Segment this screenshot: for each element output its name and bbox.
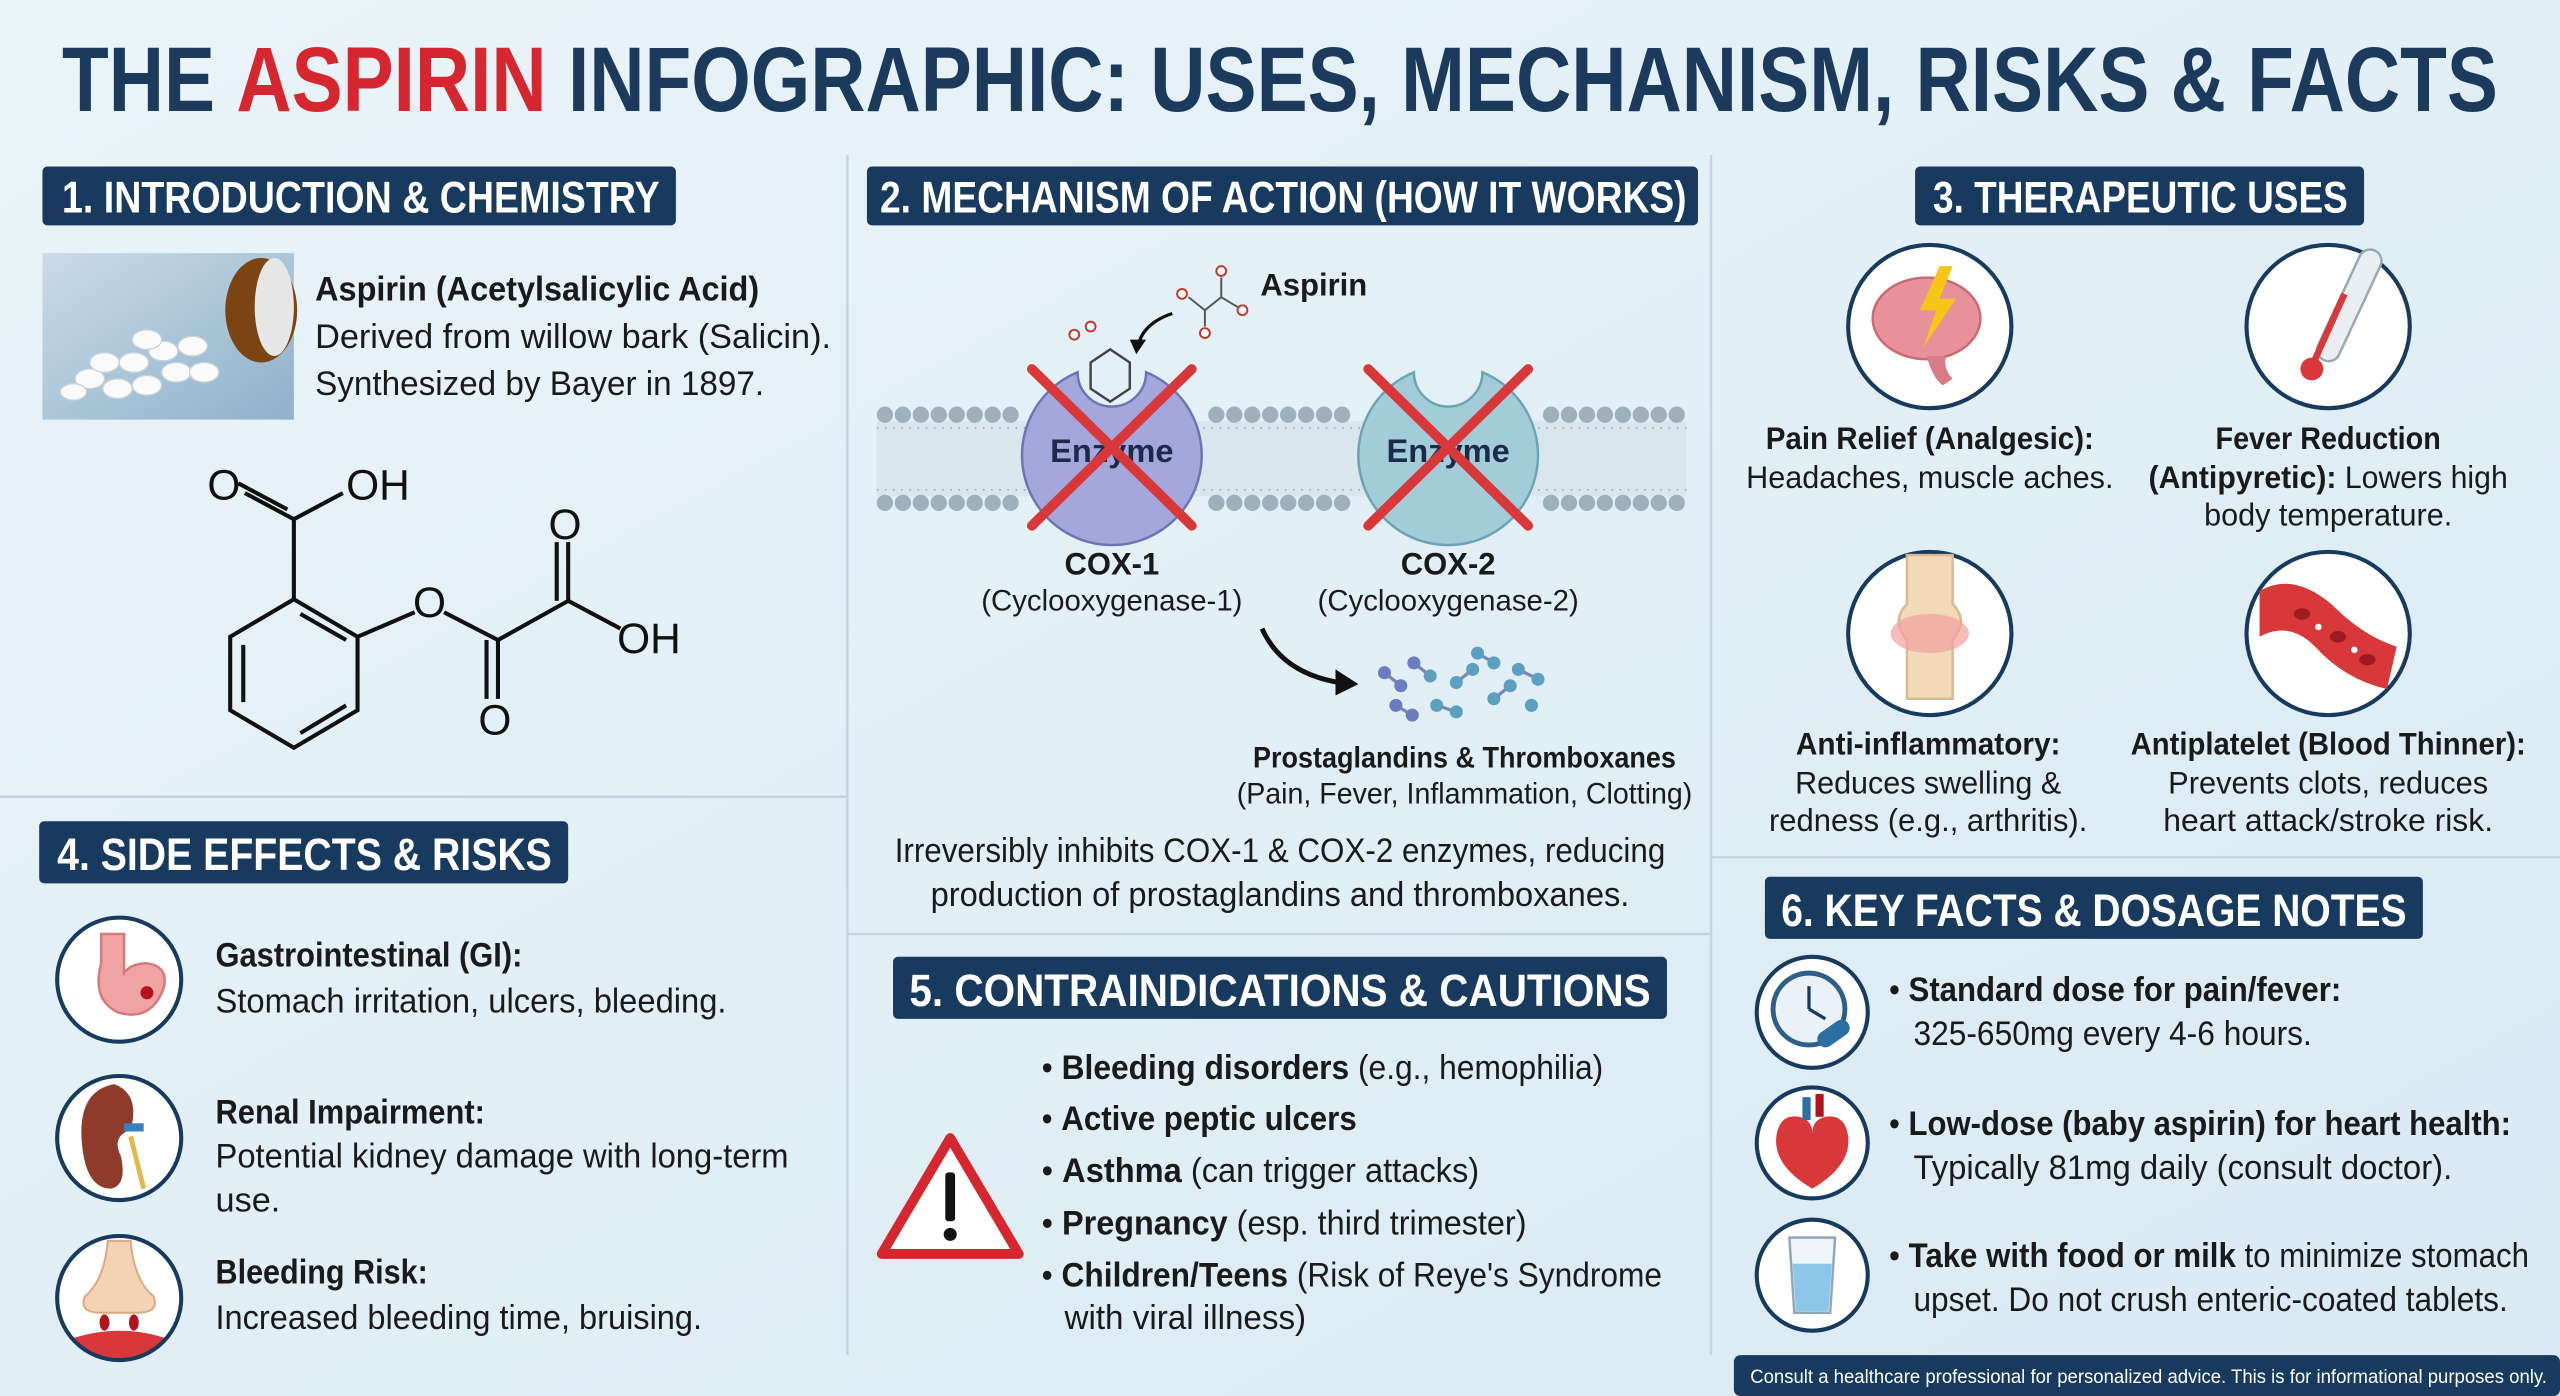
side effect texts: use. <box>216 1181 280 1219</box>
icon: heart <box>1757 1087 1868 1198</box>
key facts text: • Standard dose for pain/fever: <box>1889 971 2341 1009</box>
heading 1: 1. INTRODUCTION & CHEMISTRY <box>62 173 660 222</box>
use texts: Headaches, muscle aches. <box>1746 460 2113 495</box>
key facts text: 325-650mg every 4-6 hours. <box>1913 1015 2312 1053</box>
use texts: (Antipyretic): Lowers high <box>2149 460 2508 495</box>
photo: pills and bottle <box>42 253 297 420</box>
enzyme labels: COX-1 <box>1064 547 1159 582</box>
side effect texts: Renal Impairment: <box>216 1093 485 1131</box>
panel: introduction & chemistry <box>42 167 831 748</box>
chemical structure: aspirin <box>207 462 681 748</box>
panel: side effects & risks <box>39 821 789 1368</box>
enzyme COX-1: Enzyme <box>1050 432 1174 469</box>
enzyme COX-2: Enzyme <box>1386 432 1510 469</box>
use texts: Antiplatelet (Blood Thinner): <box>2131 726 2526 761</box>
intro text: Derived from willow bark (Salicin). <box>315 318 831 356</box>
aspirin molecule label <box>1069 266 1367 354</box>
side effect texts: Bleeding Risk: <box>216 1253 428 1291</box>
icon: stomach <box>57 918 181 1042</box>
use texts <box>1746 421 2526 838</box>
prostaglandins label: Prostaglandins & Thromboxanes <box>1253 741 1676 774</box>
enzyme labels: (Cyclooxygenase-2) <box>1318 585 1579 618</box>
heading 3: 3. THERAPEUTIC USES <box>1933 173 2348 222</box>
prostaglandins label: (Pain, Fever, Inflammation, Clotting) <box>1237 777 1692 810</box>
use texts: body temperature. <box>2204 498 2452 533</box>
prostaglandin molecules <box>1378 647 1544 722</box>
use texts: Pain Relief (Analgesic): <box>1766 421 2094 456</box>
intro text: Aspirin (Acetylsalicylic Acid) <box>315 270 759 308</box>
arrow to prostaglandins <box>1262 629 1358 696</box>
intro text <box>315 270 831 403</box>
contraindication list <box>1042 1049 1662 1337</box>
side effect texts: Potential kidney damage with long-term <box>216 1137 789 1175</box>
mechanism summary <box>895 832 1665 914</box>
enzyme labels: COX-2 <box>1401 547 1496 582</box>
heading 2: 2. MECHANISM OF ACTION (HOW IT WORKS) <box>880 173 1687 222</box>
enzyme labels: (Cyclooxygenase-1) <box>981 585 1242 618</box>
mechanism summary: Irreversibly inhibits COX-1 & COX-2 enzymes, reducing <box>895 832 1665 870</box>
prostaglandins label <box>1237 741 1692 810</box>
membrane <box>877 407 1687 511</box>
use texts: Fever Reduction <box>2216 421 2441 456</box>
icon: clock and pill <box>1757 957 1868 1068</box>
contraindication list: with viral illness) <box>1064 1299 1306 1337</box>
use texts: Reduces swelling & <box>1795 766 2062 801</box>
panel: mechanism of action <box>867 167 1698 914</box>
use texts: Anti-inflammatory: <box>1796 726 2060 761</box>
heading 5: 5. CONTRAINDICATIONS & CAUTIONS <box>909 965 1651 1016</box>
key facts text: upset. Do not crush enteric-coated tablets. <box>1913 1281 2508 1319</box>
enzyme COX-2 <box>1358 369 1538 545</box>
chemical structure: aspirin: OH <box>617 615 681 662</box>
enzyme labels <box>981 547 1579 618</box>
contraindication list: • Active peptic ulcers <box>1042 1100 1357 1138</box>
panel: therapeutic uses <box>1746 167 2526 838</box>
key facts text: Typically 81mg daily (consult doctor). <box>1913 1149 2452 1187</box>
aspirin molecule label: Aspirin <box>1260 268 1367 303</box>
use texts: redness (e.g., arthritis). <box>1769 803 2087 838</box>
icon: joint <box>1848 552 2011 715</box>
icon: warning triangle <box>882 1138 1019 1254</box>
mechanism summary: production of prostaglandins and thromboxanes. <box>931 876 1629 914</box>
key facts text: • Take with food or milk to minimize stomach <box>1889 1237 2529 1275</box>
icon: nose bleed <box>57 1236 181 1368</box>
icon: thermometer <box>2247 245 2410 408</box>
use texts: Prevents clots, reduces <box>2168 766 2488 801</box>
use texts: heart attack/stroke risk. <box>2163 803 2493 838</box>
contraindication list: • Bleeding disorders (e.g., hemophilia) <box>1042 1049 1603 1087</box>
chemical structure: aspirin: O <box>413 579 446 626</box>
icon: kidney <box>57 1076 181 1200</box>
side effect texts <box>216 937 789 1337</box>
contraindication list: • Asthma (can trigger attacks) <box>1042 1152 1479 1190</box>
panel: key facts & dosage <box>1757 877 2529 1331</box>
icon: brain <box>1848 245 2011 408</box>
side effect texts: Stomach irritation, ulcers, bleeding. <box>216 982 727 1020</box>
chemical structure: aspirin: O <box>478 697 511 744</box>
side effect texts: Gastrointestinal (GI): <box>216 937 522 975</box>
heading 4: 4. SIDE EFFECTS & RISKS <box>57 829 552 880</box>
footer disclaimer <box>1734 1355 2560 1396</box>
key facts text <box>1889 971 2529 1319</box>
contraindication list: • Pregnancy (esp. third trimester) <box>1042 1204 1527 1242</box>
icon: blood vessel <box>2247 552 2410 715</box>
chemical structure: aspirin: OH <box>346 462 410 509</box>
chemical structure: aspirin: O <box>207 462 240 509</box>
intro text: Synthesized by Bayer in 1897. <box>315 365 764 403</box>
heading 6: 6. KEY FACTS & DOSAGE NOTES <box>1781 885 2407 936</box>
contraindication list: • Children/Teens (Risk of Reye's Syndrome <box>1042 1257 1662 1295</box>
enzyme COX-1 <box>1022 349 1202 545</box>
icon: glass of water <box>1757 1220 1868 1331</box>
panel: contraindications <box>882 957 1667 1337</box>
side effect texts: Increased bleeding time, bruising. <box>216 1299 702 1337</box>
key facts text: • Low-dose (baby aspirin) for heart health: <box>1889 1105 2511 1143</box>
chemical structure: aspirin: O <box>549 501 582 548</box>
